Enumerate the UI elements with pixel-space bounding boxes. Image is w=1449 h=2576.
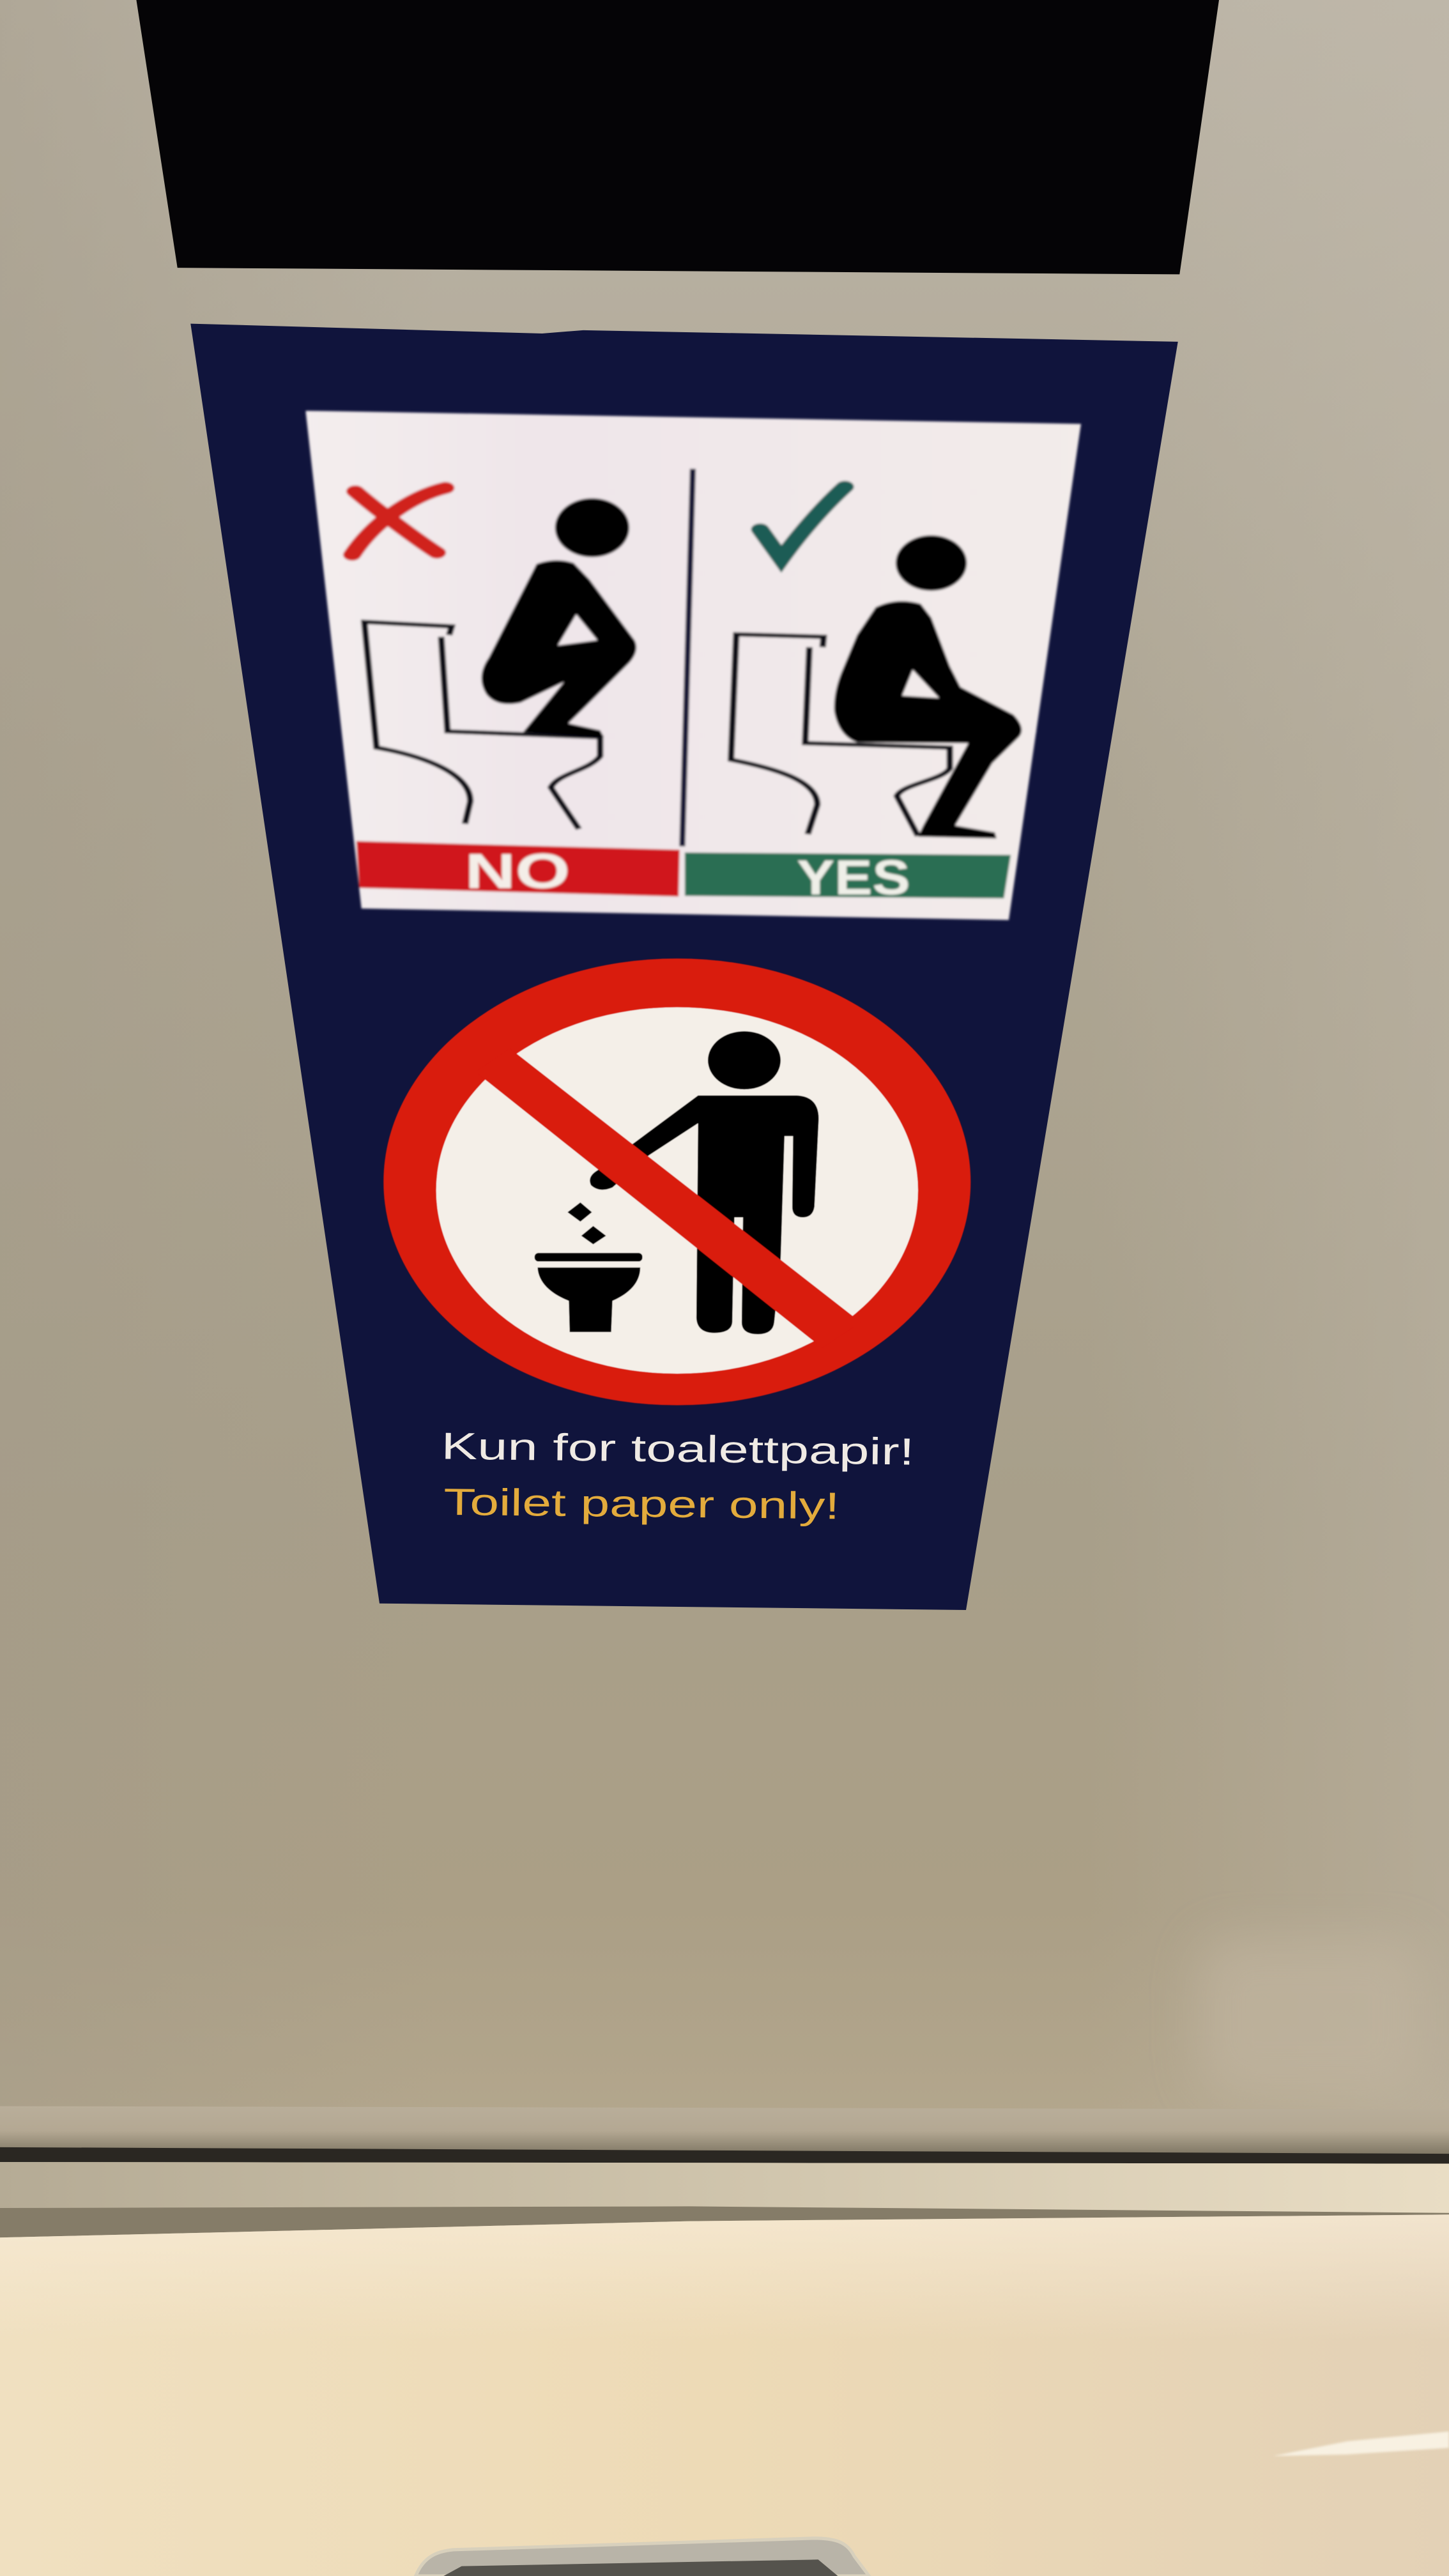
wall highlight reflection — [1199, 1938, 1423, 2096]
panel: prohibition sign — [383, 958, 970, 1406]
torso, arm and legs — [590, 1096, 819, 1334]
metal fixture at bottom — [416, 2538, 869, 2576]
icon: person throwing — [590, 1031, 819, 1334]
black label at top — [136, 0, 1219, 274]
toilet outline right — [731, 634, 950, 836]
NO label text: NO — [465, 844, 570, 899]
seated person — [834, 535, 1022, 838]
toilet outline left — [364, 622, 600, 829]
head — [555, 498, 629, 557]
white circle — [436, 1008, 918, 1374]
body — [834, 601, 1022, 838]
icon: paper pieces — [567, 1202, 606, 1245]
YES label text: YES — [797, 850, 910, 905]
panel: sitting posture — [305, 411, 1081, 920]
icon: green check — [760, 487, 845, 559]
NO label bar — [356, 841, 680, 896]
basin reflection — [1273, 2432, 1449, 2456]
door bottom edge and sill — [0, 2106, 1449, 2237]
cream basin surface — [0, 2214, 1449, 2576]
icon: toilet bowl — [535, 1253, 643, 1332]
fixture dark inset — [443, 2559, 838, 2576]
icon: red cross — [352, 488, 445, 555]
red prohibition ring — [383, 958, 970, 1406]
centre divider — [682, 469, 693, 847]
YES label bar — [685, 852, 1011, 898]
Norwegian caption: Kun for toalettpapir! — [441, 1424, 915, 1473]
white panel background — [305, 411, 1081, 920]
red prohibition slash — [475, 1048, 861, 1348]
figure: sitting on toilet, correct — [731, 535, 1022, 838]
head — [896, 535, 967, 591]
squatting person — [482, 498, 636, 737]
body — [482, 560, 636, 737]
head — [708, 1031, 781, 1089]
fixture rim — [416, 2538, 869, 2576]
navy sticker — [190, 324, 1178, 1610]
English caption: Toilet paper only! — [443, 1480, 840, 1527]
posture artwork — [352, 469, 1022, 898]
figure: squatting on toilet, wrong — [364, 498, 636, 829]
